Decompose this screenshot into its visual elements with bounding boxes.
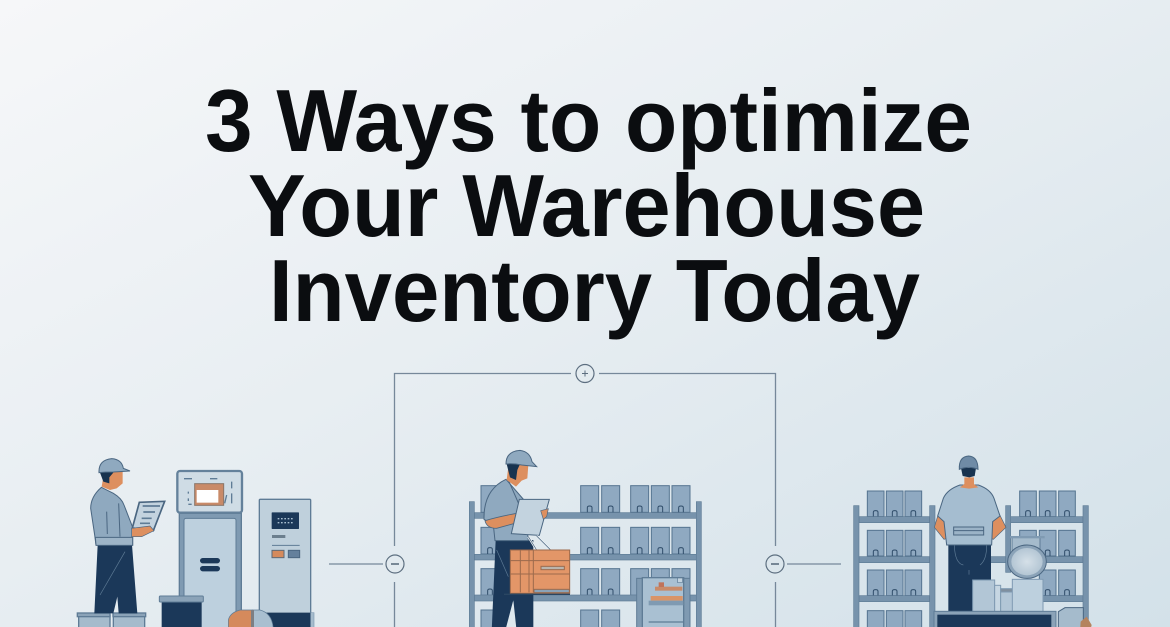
tablet	[132, 501, 165, 531]
title: Inventory Today	[269, 241, 920, 340]
icon: right minus node	[766, 555, 784, 573]
parcel	[228, 610, 253, 627]
title: Your Warehouse	[248, 156, 925, 255]
worker head	[102, 470, 123, 490]
worker legs	[94, 545, 137, 613]
stools	[77, 613, 146, 627]
bin	[162, 601, 202, 627]
crate handles	[528, 536, 551, 550]
back pocket	[954, 527, 984, 535]
right machine	[259, 499, 311, 614]
right shelving unit	[990, 491, 1088, 627]
kiosk machine	[179, 513, 241, 627]
icon: top plus node	[576, 364, 594, 382]
clipboard	[511, 499, 549, 535]
hand	[132, 526, 154, 537]
right scene: worker from behind with shelves and equipment	[854, 456, 1092, 627]
worker head	[507, 465, 528, 487]
title: 3 Ways to optimize	[205, 71, 972, 170]
left shelving unit	[854, 491, 935, 627]
center scene: worker at shelves with orange crate	[469, 450, 701, 627]
tank equipment	[1012, 537, 1040, 551]
shelving unit	[469, 486, 701, 627]
connector frame	[329, 374, 841, 627]
left scene: worker with tablet and machines	[77, 459, 314, 627]
lower boxes	[973, 579, 1043, 613]
worker torso	[938, 485, 1000, 545]
worker body	[91, 487, 133, 545]
worker legs	[492, 540, 533, 627]
orange crate	[510, 550, 570, 593]
worker arms	[934, 514, 952, 539]
worker torso	[484, 479, 528, 541]
worker legs	[948, 544, 991, 612]
trolley	[637, 578, 690, 627]
forearm	[485, 513, 517, 528]
icon: left minus node	[386, 555, 404, 573]
small parcel machine	[1058, 608, 1083, 627]
title	[205, 71, 972, 340]
dark console	[934, 611, 1056, 627]
worker head	[961, 468, 976, 477]
